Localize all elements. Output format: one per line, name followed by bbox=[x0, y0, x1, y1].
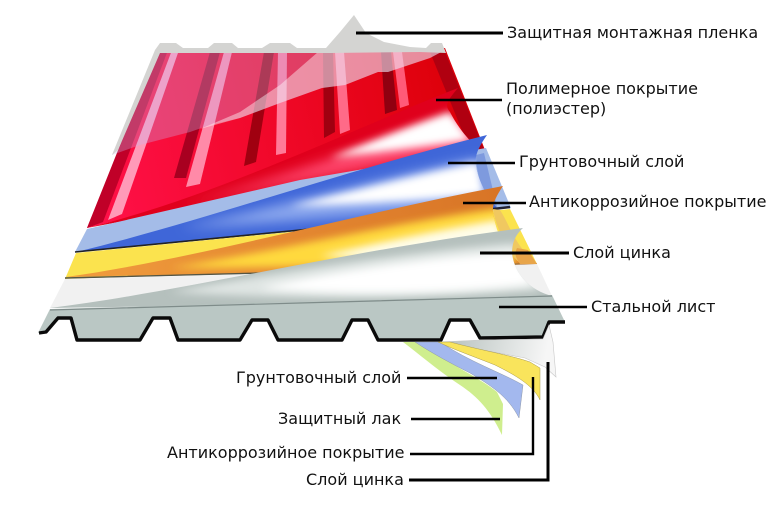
layer: light blue edge bbox=[75, 148, 511, 252]
divider line: blue and yellow bbox=[75, 209, 494, 252]
callout: protective lacquer: Защитный лак bbox=[278, 409, 401, 428]
underside flaps bbox=[403, 325, 556, 435]
flap: yellow anticorrosion bbox=[438, 342, 540, 400]
callout: polymer coating bbox=[436, 79, 698, 118]
flap: blue primer bbox=[415, 342, 523, 418]
layer: silver zinc fold bbox=[50, 228, 552, 308]
callout: lower anticorrosion: Антикоррозийное покрытие bbox=[167, 443, 404, 462]
callout: lower zinc layer bbox=[306, 362, 548, 489]
layer: orange fold bbox=[66, 186, 520, 277]
layer: steel sheet bbox=[38, 295, 565, 340]
divider line: orange and white bbox=[65, 264, 520, 278]
steel profile outline bbox=[39, 318, 565, 340]
callout: polymer coating: (полиэстер) bbox=[506, 99, 606, 118]
layer: blue primer fold bbox=[76, 135, 497, 252]
flap: green lacquer bbox=[403, 342, 503, 435]
roofing sheet illustration bbox=[38, 15, 565, 340]
callout: protective film: Защитная монтажная пленка bbox=[507, 23, 758, 42]
right orange shade bbox=[493, 209, 537, 264]
layer: protective film bbox=[112, 15, 446, 155]
callout: anticorrosion: Антикоррозийное покрытие bbox=[529, 192, 766, 211]
callout: polymer coating: Полимерное покрытие bbox=[506, 79, 698, 98]
callout: lower anticorrosion bbox=[167, 377, 533, 462]
callout: lower zinc layer: Слой цинка bbox=[306, 470, 404, 489]
film light fold bbox=[200, 50, 445, 129]
film top edge bbox=[112, 15, 446, 155]
layer: white zinc edge bbox=[50, 264, 552, 308]
callout: lower primer layer: Грунтовочный слой bbox=[236, 368, 401, 387]
callout: zinc layer: Слой цинка bbox=[573, 243, 671, 262]
layer: yellow edge bbox=[65, 209, 537, 279]
right blue shade bbox=[476, 153, 497, 207]
right orange patch bbox=[516, 248, 537, 264]
layer: red polymer sheet bbox=[87, 48, 487, 228]
callout: steel sheet: Стальной лист bbox=[591, 297, 715, 316]
flap: white zinc bbox=[440, 325, 556, 377]
layer: red polymer fold bbox=[87, 88, 482, 228]
callout: primer layer: Грунтовочный слой bbox=[519, 152, 684, 171]
